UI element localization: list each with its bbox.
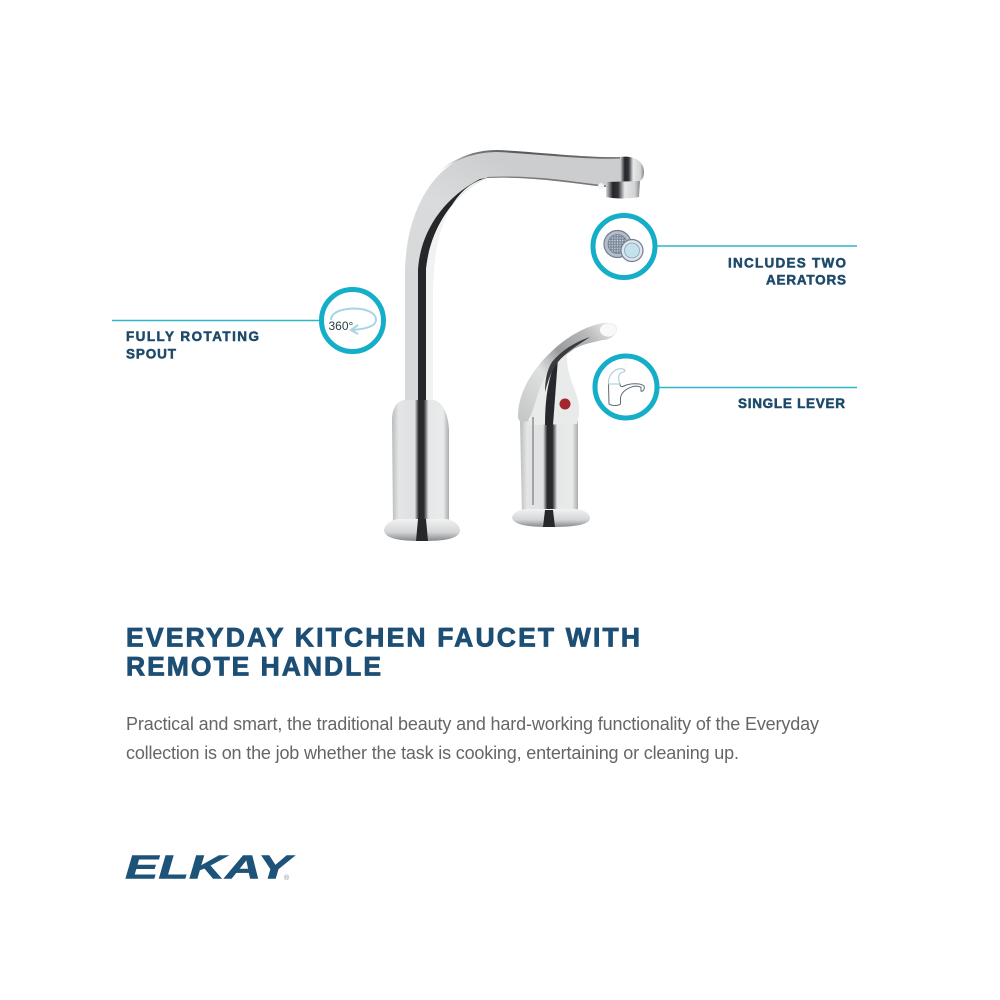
description text: collection is on the job whether the task is cooking, entertaining or cleaning up.	[126, 743, 739, 763]
handle flange	[512, 509, 590, 527]
red indicator dot	[560, 398, 570, 410]
icon: 360 rotation: 360°	[328, 319, 354, 333]
spout arm and riser	[405, 150, 628, 402]
title: EVERYDAY KITCHEN FAUCET WITH	[126, 622, 640, 652]
icon: aerators	[593, 216, 655, 278]
leader line	[655, 245, 857, 247]
logo: Elkay	[125, 848, 296, 886]
title: REMOTE HANDLE	[126, 652, 381, 682]
remote handle	[512, 323, 617, 527]
title	[126, 622, 640, 682]
icon: faucet outline	[595, 356, 657, 418]
label: SINGLE LEVER	[738, 396, 845, 411]
aerator nozzle	[606, 181, 640, 198]
leader line	[657, 386, 857, 388]
lever	[518, 323, 617, 422]
description text	[126, 714, 819, 763]
handle cylinder	[520, 420, 578, 516]
label: AERATORS	[766, 272, 846, 288]
leader line	[112, 320, 322, 322]
icon: 360 rotation	[322, 290, 384, 352]
faucet spout	[384, 150, 644, 541]
callout: fully rotating spout	[112, 290, 384, 362]
label: INCLUDES TWO	[728, 256, 846, 270]
handle dome	[530, 345, 579, 425]
callout: single lever	[595, 356, 857, 418]
label: FULLY ROTATING	[126, 329, 259, 344]
aerator cap	[620, 157, 644, 182]
label: SPOUT	[126, 346, 177, 362]
description text: Practical and smart, the traditional beauty and hard-working functionality of the Everyday	[126, 714, 819, 734]
callout: includes two aerators	[593, 216, 857, 288]
spout base	[392, 400, 449, 525]
label	[126, 329, 259, 362]
logo: Elkay: ELKAY	[125, 848, 296, 886]
spout flange	[384, 519, 460, 541]
label	[728, 256, 846, 288]
logo: Elkay: ®	[284, 874, 290, 882]
